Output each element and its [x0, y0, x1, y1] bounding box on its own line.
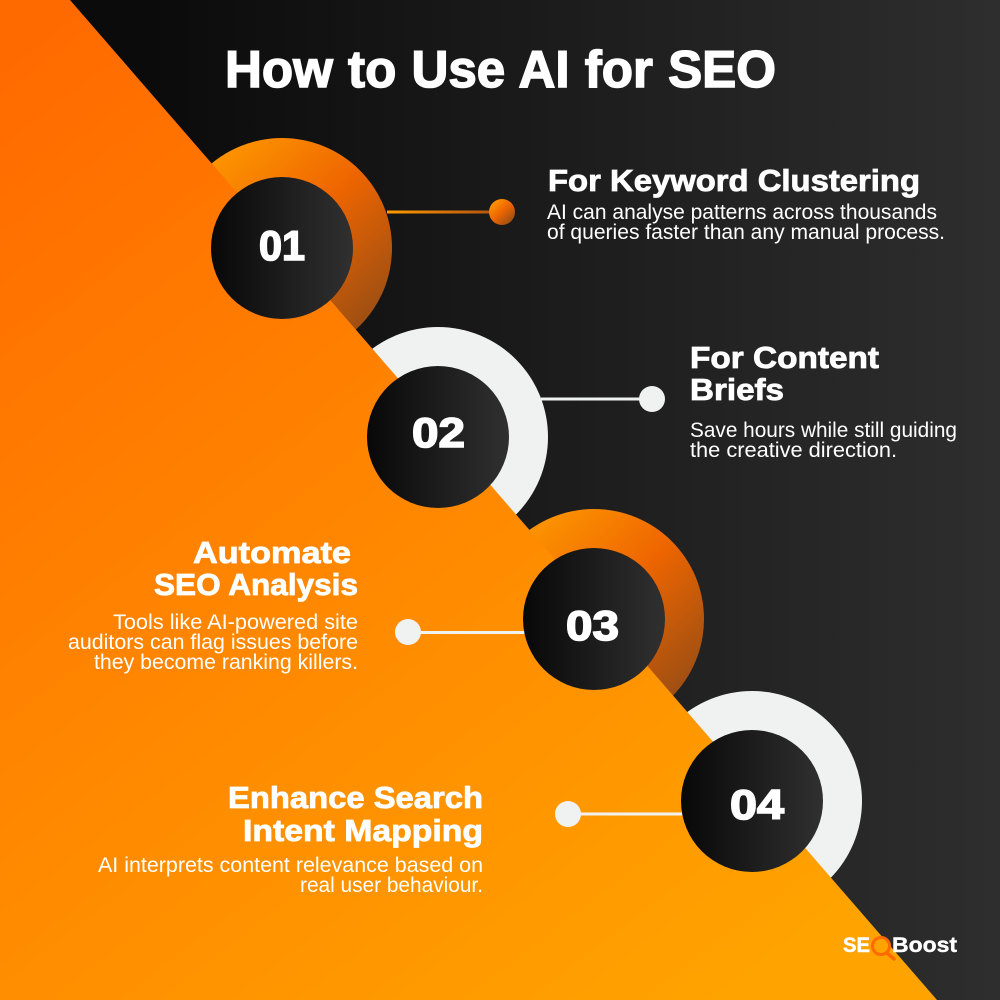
text block 02: Briefs: [690, 373, 784, 407]
icon: magnifying glass: [872, 938, 894, 959]
text block 01: [547, 164, 945, 244]
step badge 03: [523, 548, 665, 690]
step badge 03: 03: [566, 602, 619, 649]
step badge 01: [211, 177, 353, 319]
text block 02: [690, 341, 957, 462]
logo: SEO Boost: [843, 934, 957, 959]
text block 01: AI can analyse patterns across thousands: [547, 201, 937, 224]
text block 03: [68, 536, 358, 674]
ring 03: [484, 509, 704, 729]
connector 03: [395, 619, 525, 645]
logo: SEO Boost: SE: [843, 934, 870, 957]
text block 04: real user behaviour.: [300, 874, 483, 897]
text block 04: AI interprets content relevance based on: [98, 854, 483, 877]
ring 02: [328, 327, 548, 547]
connector 01: [387, 199, 515, 225]
ring 01: [172, 138, 392, 358]
text block 03: they become ranking killers.: [94, 651, 358, 674]
connector 02: [541, 386, 665, 412]
logo: SEO Boost: Boost: [892, 934, 957, 957]
text block 04: Intent Mapping: [243, 814, 483, 848]
ring 04: [642, 691, 862, 911]
title: How to Use AI for SEO: [225, 41, 776, 99]
text block 03: Tools like AI-powered site: [113, 611, 358, 634]
text block 04: Enhance Search: [228, 781, 483, 815]
step badge 01: 01: [259, 222, 305, 269]
connector 04: [555, 801, 684, 827]
text block 03: SEO Analysis: [154, 568, 358, 602]
text block 02: Save hours while still guiding: [690, 419, 957, 442]
text block 03: auditors can flag issues before: [68, 631, 358, 654]
step badge 04: 04: [730, 781, 785, 828]
text block 02: For Content: [690, 341, 879, 375]
text block 03: Automate: [193, 536, 351, 570]
text block 04: [98, 781, 483, 897]
text block 01: For Keyword Clustering: [548, 164, 920, 198]
text block 01: of queries faster than any manual process.: [547, 221, 945, 244]
step badge 02: [367, 366, 509, 508]
step badge 04: [681, 730, 823, 872]
text block 02: the creative direction.: [690, 439, 897, 462]
step badge 02: 02: [412, 409, 465, 456]
